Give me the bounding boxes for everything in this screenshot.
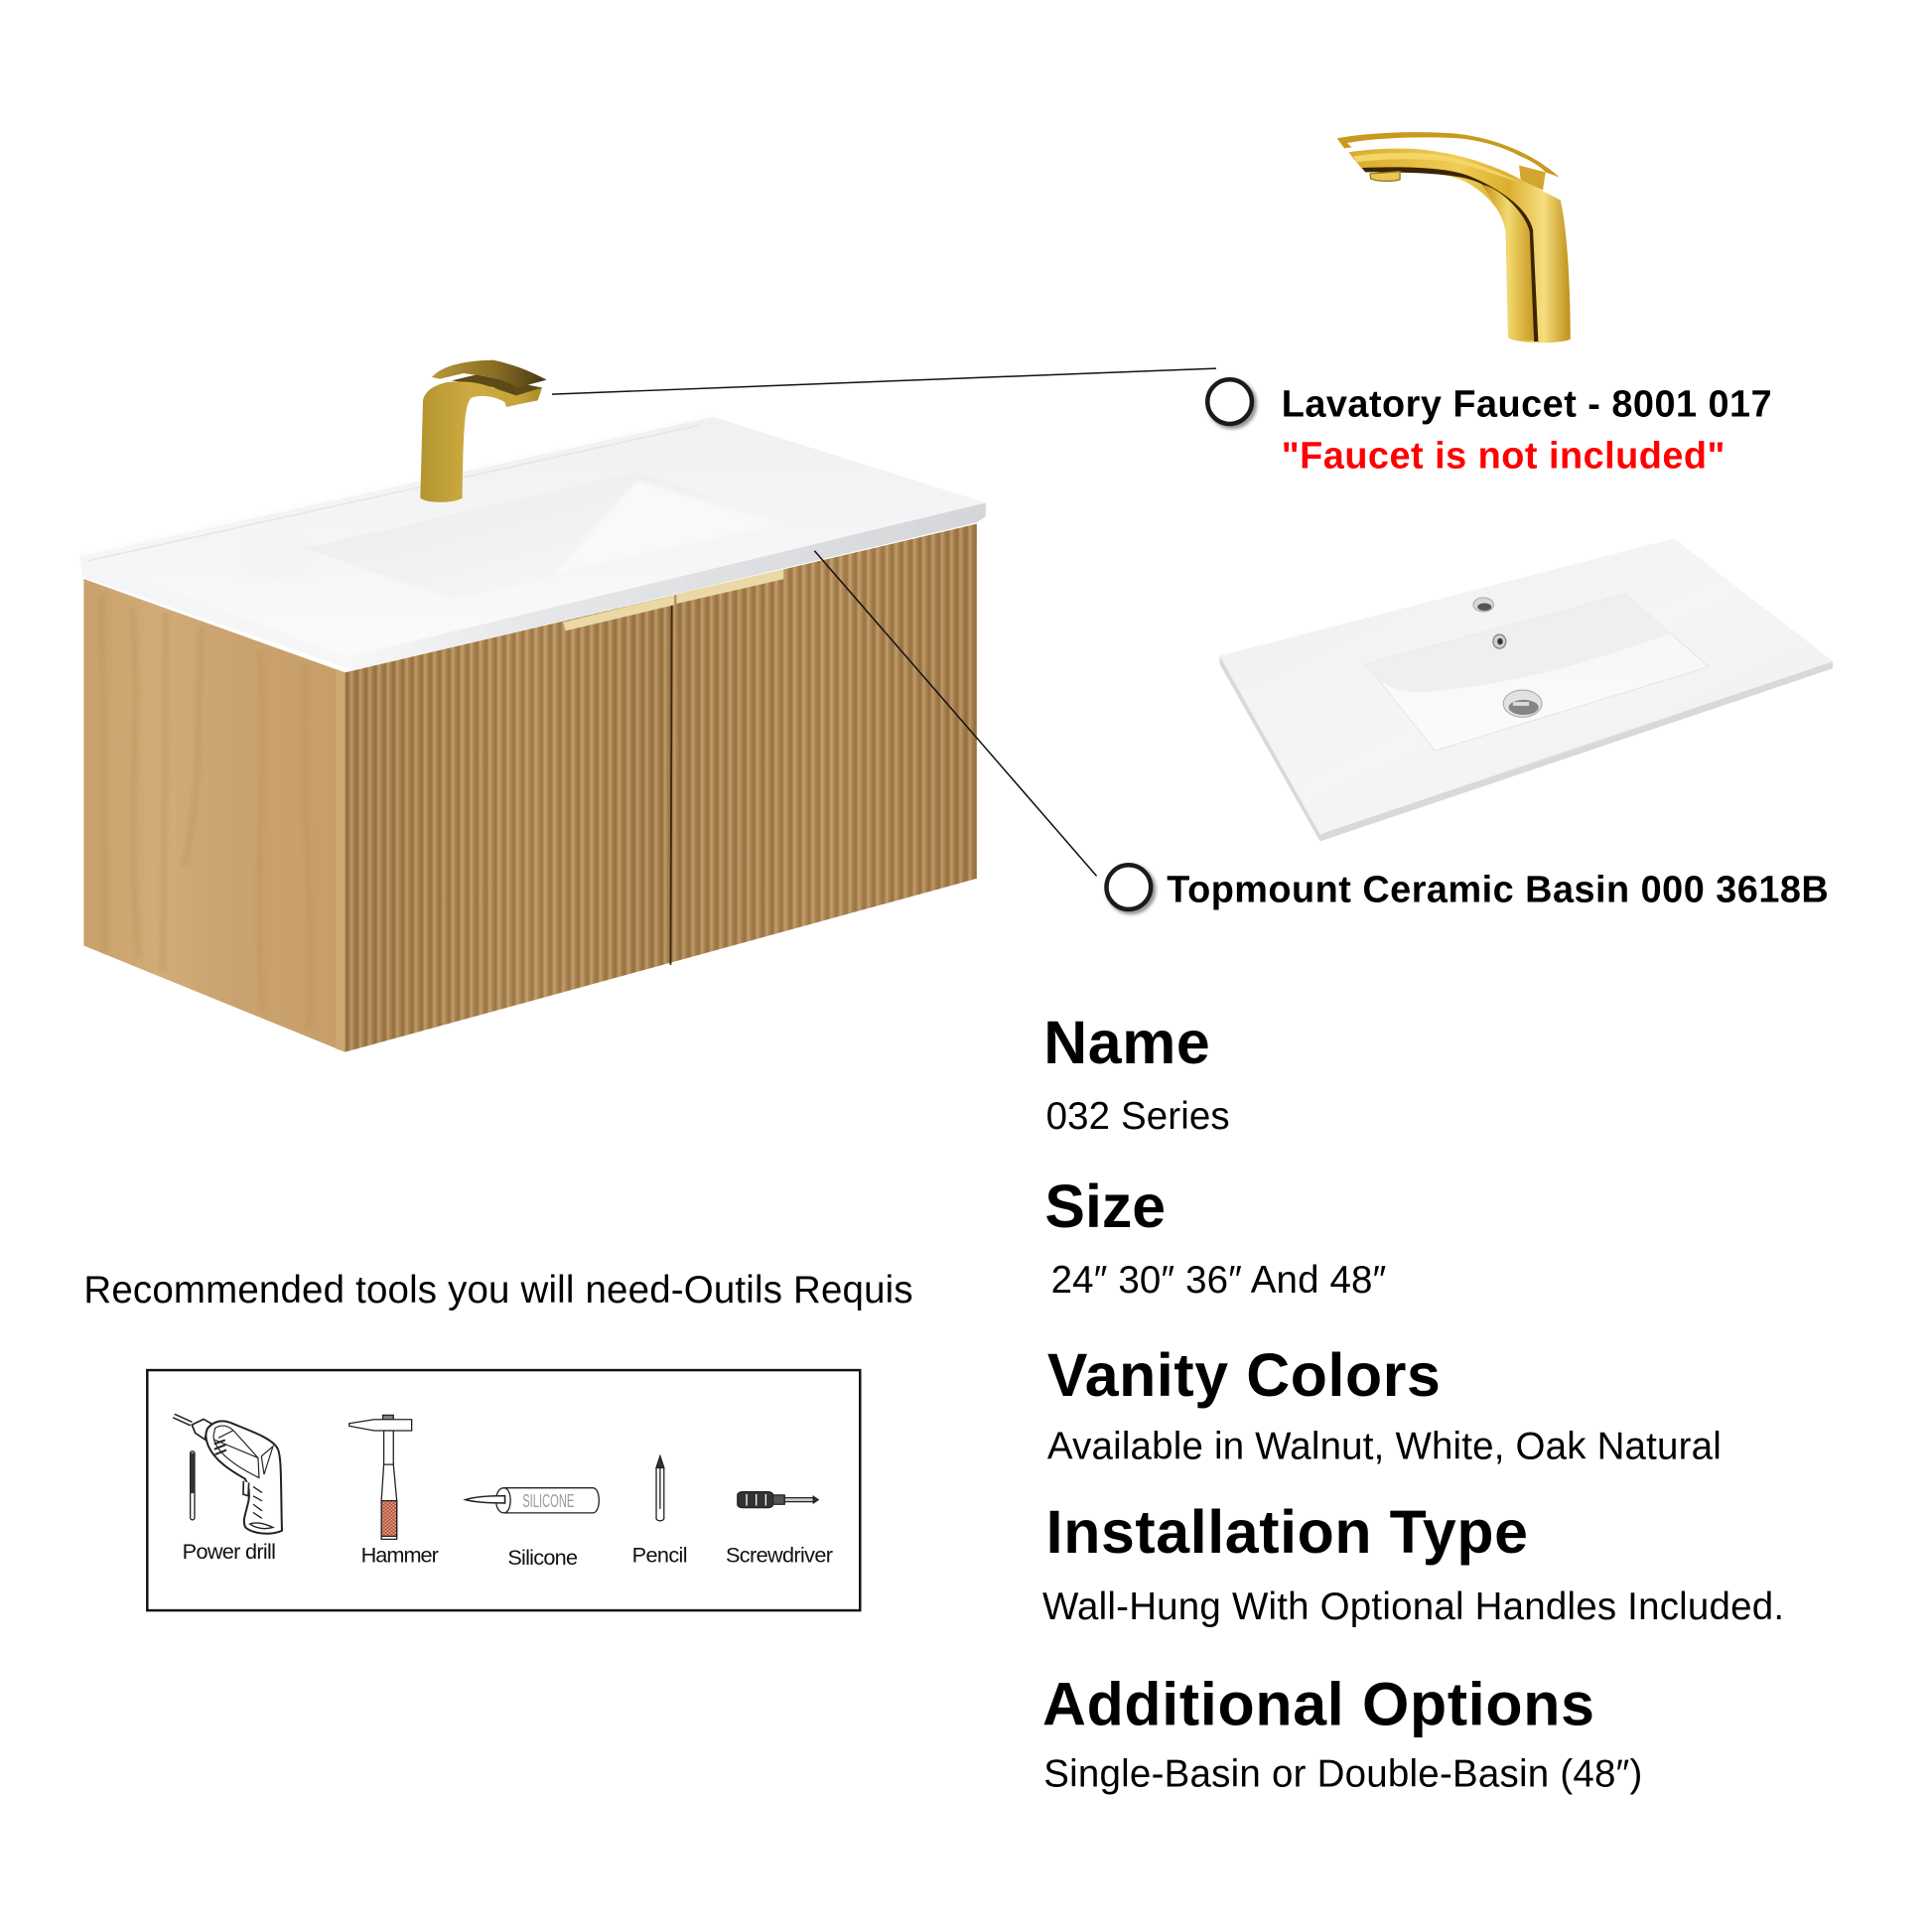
leader line to basin [814, 551, 1097, 876]
size value: 24″ 30″ 36″ And 48″ [1051, 1259, 1386, 1302]
ceramic countertop [79, 415, 986, 670]
name heading: Name [1043, 1009, 1210, 1076]
label: screwdriver: Screwdriver [726, 1543, 833, 1568]
tool icons [349, 1415, 818, 1539]
colors heading: Vanity Colors [1047, 1341, 1441, 1409]
icon: pencil [656, 1456, 664, 1521]
options value: Single-Basin or Double-Basin (48″) [1043, 1753, 1642, 1796]
marker circle [1106, 865, 1154, 911]
cabinet body [83, 524, 977, 1052]
label: power drill: Power drill [183, 1539, 276, 1564]
basin bowl [306, 472, 788, 600]
recommended tools heading: Recommended tools you will need-Outils Requis [83, 1269, 913, 1311]
faucet not included note: "Faucet is not included" [1282, 436, 1725, 478]
specification: vanity colors [1047, 1341, 1722, 1467]
installation value: Wall-Hung With Optional Handles Included. [1042, 1586, 1784, 1628]
panel border [147, 1370, 860, 1610]
name value: 032 Series [1046, 1095, 1230, 1138]
gold faucet detail photo [1337, 132, 1571, 343]
icon: power drill [174, 1416, 282, 1534]
ceramic basin detail photo [1220, 539, 1833, 841]
label: pencil: Pencil [632, 1543, 688, 1568]
label: silicone: Silicone [507, 1545, 578, 1570]
leader line to faucet [552, 368, 1216, 394]
door handles [563, 569, 783, 630]
callout: topmount basin [1106, 865, 1829, 911]
cabinet front with ribbed doors [345, 524, 977, 1052]
label: hammer: Hammer [361, 1543, 439, 1568]
options heading: Additional Options [1042, 1671, 1594, 1738]
faucet label: Lavatory Faucet - 8001 017 [1282, 383, 1772, 425]
specification: name [1043, 1009, 1230, 1138]
specification: installation type [1042, 1498, 1784, 1628]
basin label: Topmount Ceramic Basin 000 3618B [1167, 869, 1829, 910]
gold faucet on vanity [420, 360, 547, 502]
specification: size [1044, 1173, 1386, 1302]
installation heading: Installation Type [1046, 1498, 1528, 1566]
icon: screwdriver [738, 1492, 818, 1508]
callout: lavatory faucet [1207, 379, 1772, 478]
vanity product illustration [79, 360, 986, 1052]
marker circle [1207, 379, 1254, 426]
size heading: Size [1044, 1173, 1166, 1240]
cabinet side panel [83, 579, 345, 1052]
silicone tube lettering: SILICONE [522, 1490, 574, 1511]
colors value: Available in Walnut, White, Oak Natural [1047, 1425, 1722, 1467]
icon: hammer [349, 1415, 412, 1539]
icon: silicone tube [466, 1488, 599, 1513]
tools panel [147, 1370, 860, 1610]
specification: additional options [1042, 1670, 1642, 1796]
